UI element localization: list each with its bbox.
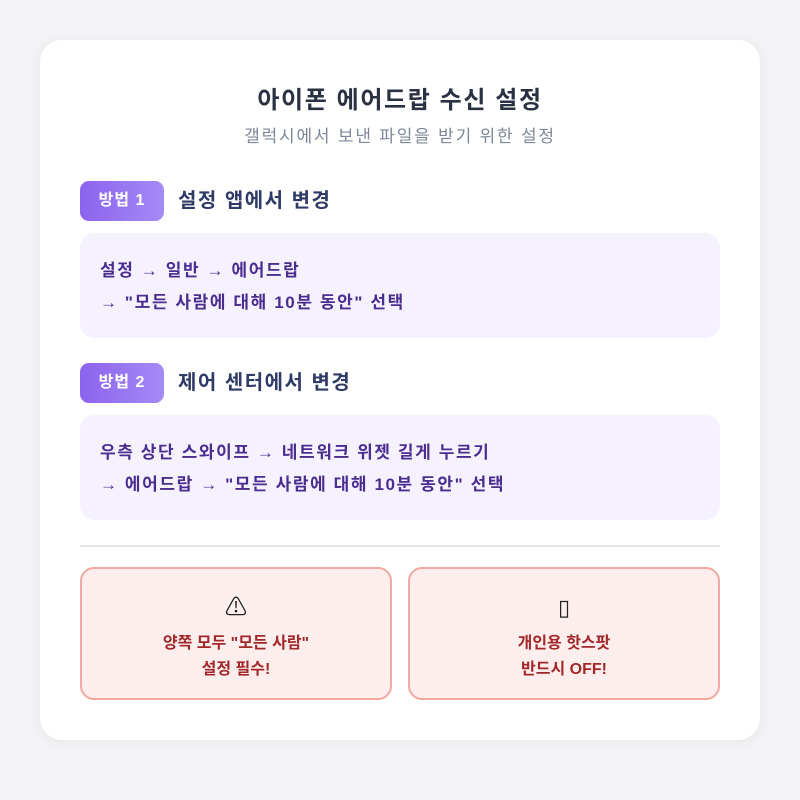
panel: method 1 steps: [80, 233, 720, 338]
badge: method 2: [80, 363, 164, 403]
subtitle: 갤럭시에서 보낸 파일을 받기 위한 설정: [244, 127, 556, 146]
callout: hotspot off: 개인용 핫스팟: [518, 635, 610, 652]
callout: both everyone: [80, 567, 392, 700]
panel: method 2 steps: [80, 415, 720, 520]
callout: hotspot off: [408, 567, 720, 700]
heading: method 2: 제어 센터에서 변경: [178, 372, 351, 394]
badge: method 1: [80, 181, 164, 221]
heading: method 1: 설정 앱에서 변경: [178, 190, 331, 212]
callout: both everyone: 양쪽 모두 "모든 사람": [163, 635, 309, 652]
callout: hotspot off: 반드시 OFF!: [521, 661, 607, 678]
panel: method 1 steps: 설정 → 일반 → 에어드랍: [100, 261, 300, 280]
panel: method 2 steps: → 에어드랍 → "모든 사람에 대해 10분 동안" 선택: [100, 475, 505, 494]
badge: method 1: 방법 1: [99, 192, 145, 209]
card: [40, 40, 760, 740]
callout: both everyone: 설정 필수!: [202, 661, 270, 678]
callout: hotspot off: ▯: [558, 595, 570, 620]
callout: both everyone: ⚠: [225, 595, 247, 620]
badge: method 2: 방법 2: [99, 374, 145, 391]
panel: method 2 steps: 우측 상단 스와이프 → 네트워크 위젯 길게 누르기: [100, 443, 490, 462]
panel: method 1 steps: → "모든 사람에 대해 10분 동안" 선택: [100, 293, 405, 312]
title: 아이폰 에어드랍 수신 설정: [257, 87, 543, 114]
